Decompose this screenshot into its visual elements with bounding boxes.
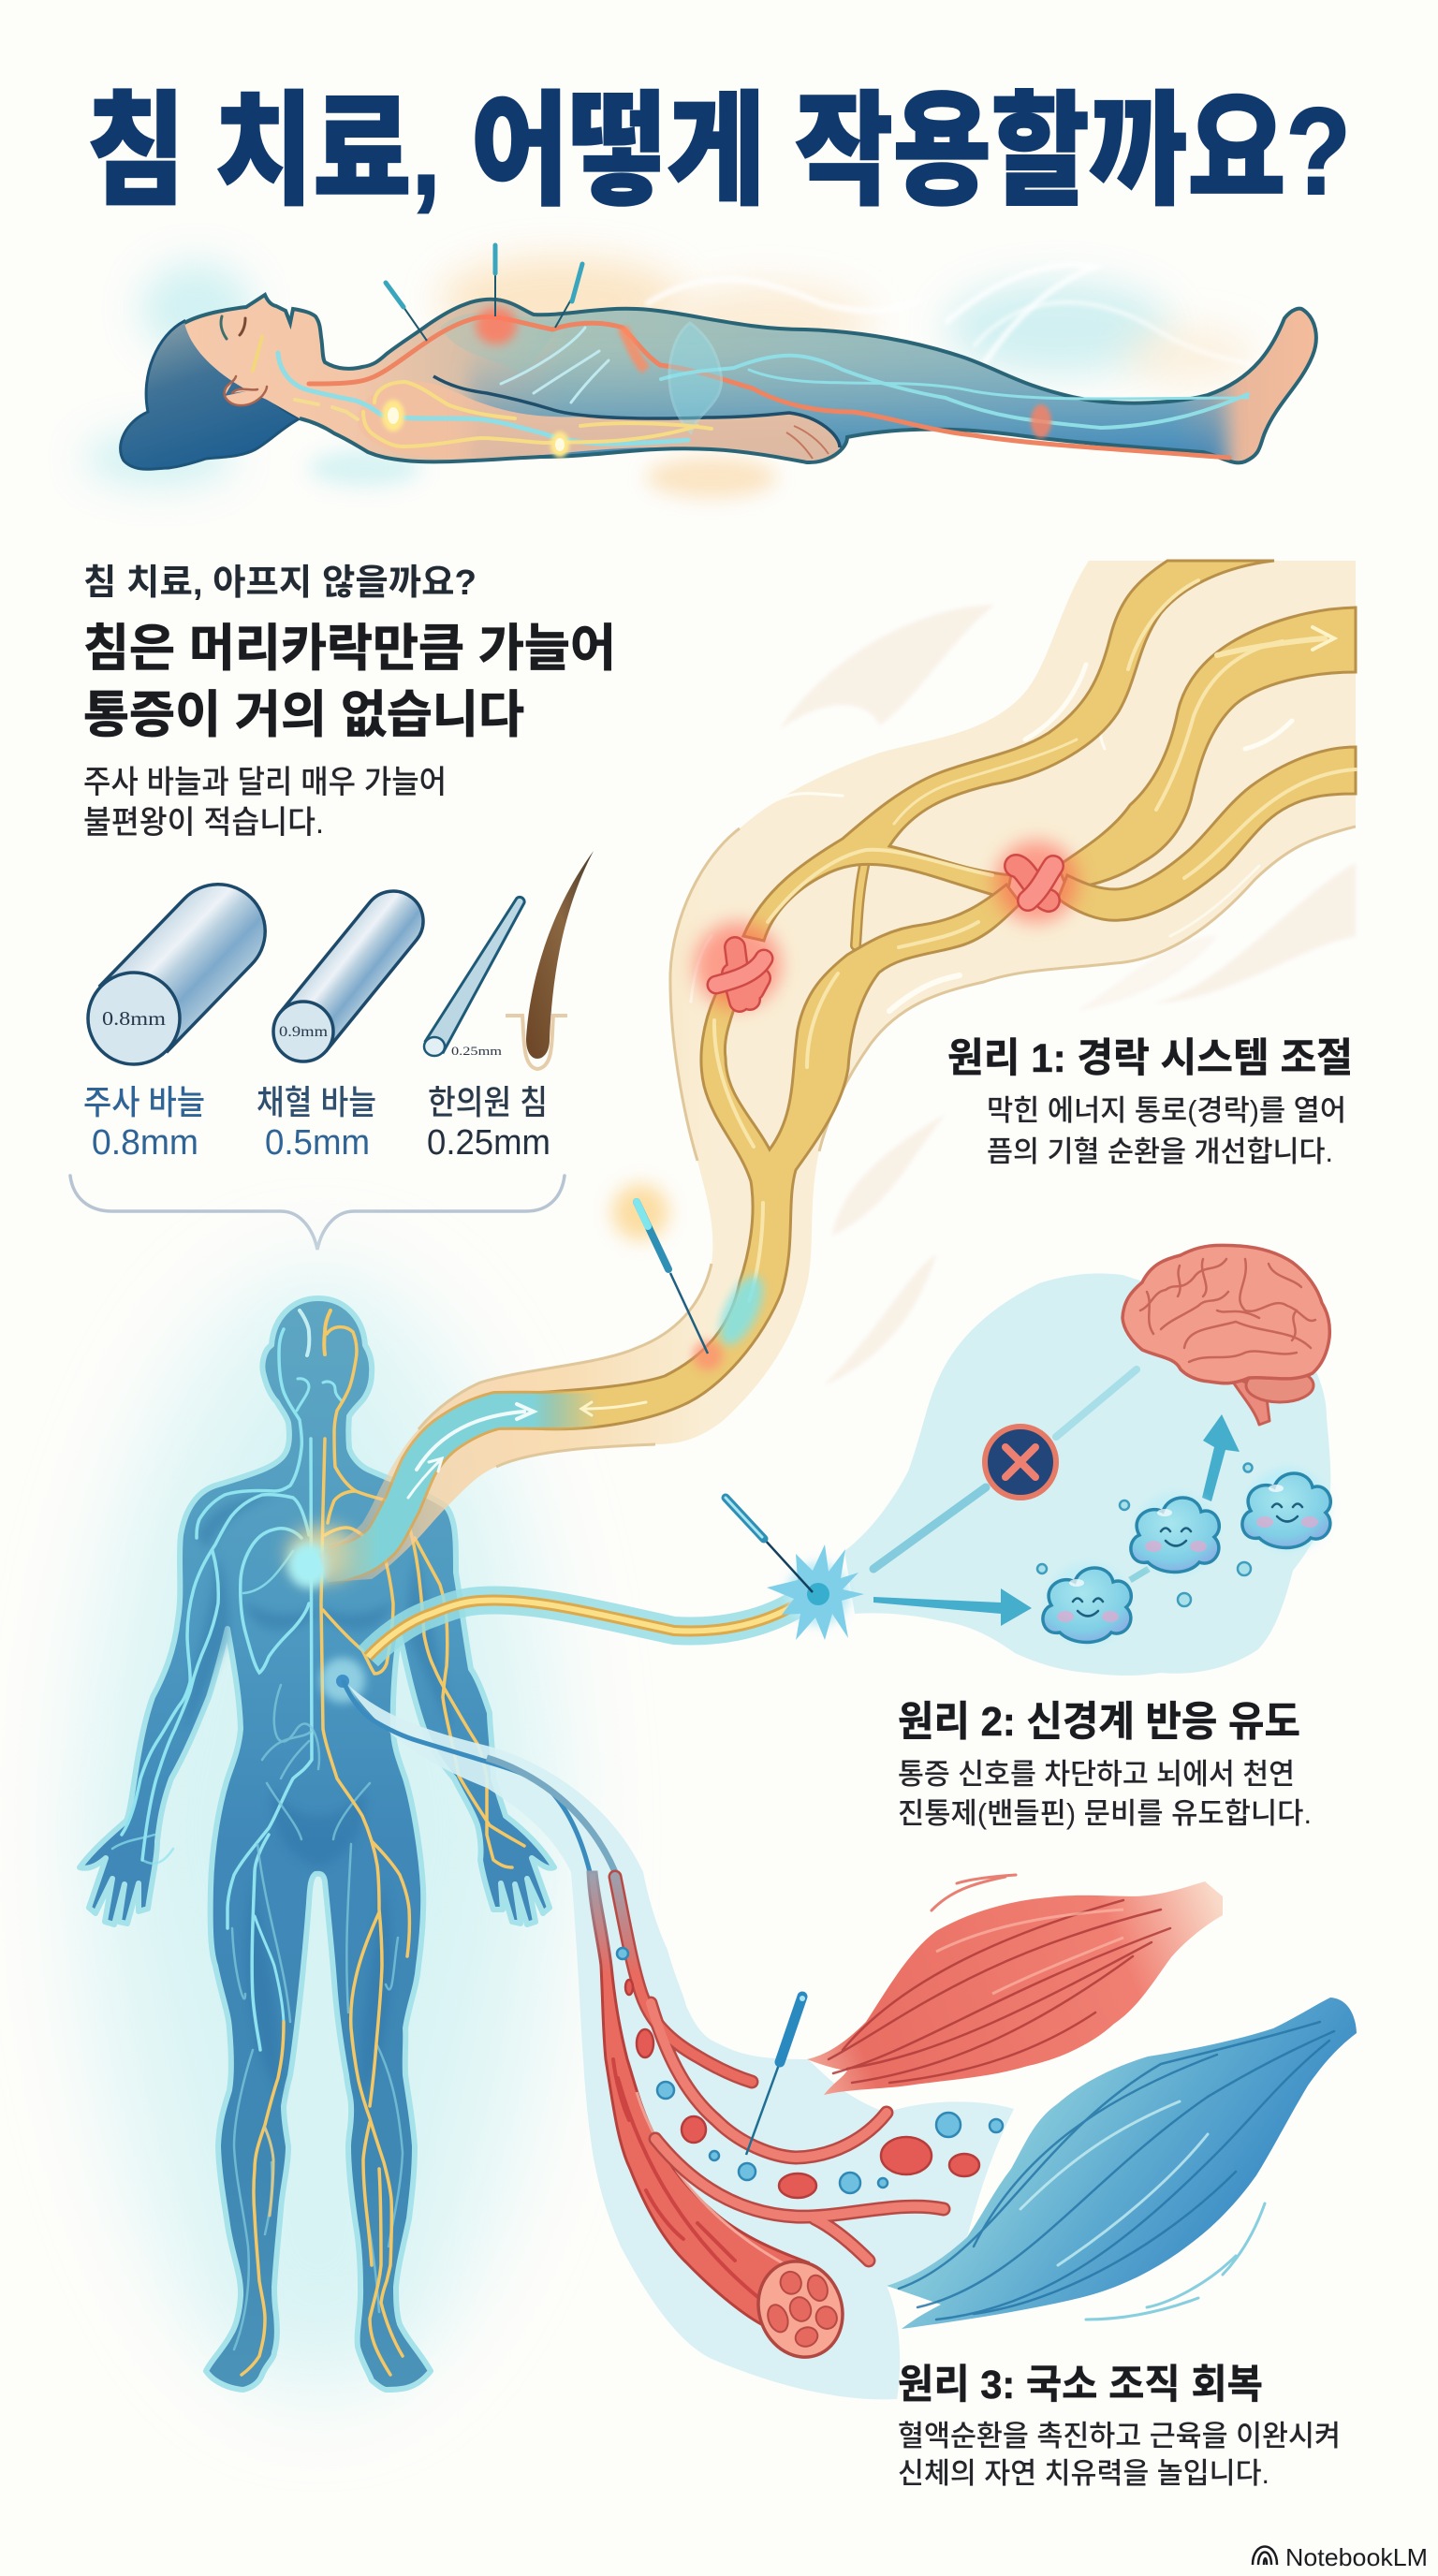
principle 1 text: 원리 1: 경락 시스템 조절 xyxy=(947,1036,1353,1081)
question heading: 침 치료, 아프지 않을까요? xyxy=(83,564,477,603)
second vessel line xyxy=(487,1758,615,1872)
meridian: yellow lines xyxy=(363,382,712,446)
lower trunk turning cyan xyxy=(325,1410,599,1566)
vessel end xyxy=(745,2249,856,2369)
brace xyxy=(70,1176,565,1250)
acupuncture needle xyxy=(424,897,524,1058)
principle 3 text: 혈액순환을 촉진하고 근육을 이완시켜 xyxy=(898,2420,1341,2452)
blue cells xyxy=(617,1948,1003,2193)
icon: brain xyxy=(1123,1245,1329,1425)
main message xyxy=(83,621,616,743)
muscle shading xyxy=(183,1493,454,2097)
label: lancet: 0.5mm xyxy=(265,1123,370,1163)
heart glow xyxy=(287,1526,359,1588)
injection needle cylinder xyxy=(88,885,265,1064)
abdomen point xyxy=(320,1658,365,1703)
gold channel A xyxy=(743,561,1274,941)
blocked signal line xyxy=(873,1369,1137,1569)
principle 2 text xyxy=(898,1699,1312,1830)
arm xyxy=(358,381,840,463)
label: acupuncture needle: 0.25mm xyxy=(427,1123,550,1163)
needle xyxy=(746,1996,805,2155)
body aura xyxy=(66,1264,572,2406)
principle 3 text: 신체의 자연 치유력을 놀입니다. xyxy=(898,2457,1269,2490)
injection needle cylinder: 0.8mm xyxy=(102,1007,166,1030)
label: injection needle: 0.8mm xyxy=(92,1123,198,1163)
highlights on ribbon xyxy=(691,665,1292,1011)
label: acupuncture needle xyxy=(427,1083,550,1163)
icon: knot 1 xyxy=(716,947,764,1002)
principle 1 text xyxy=(947,1036,1353,1168)
blood lancet cylinder: 0.9mm xyxy=(279,1024,329,1040)
hair xyxy=(121,321,300,469)
connector channel xyxy=(856,866,864,945)
panel: needle thickness explanation xyxy=(70,564,616,1250)
description xyxy=(83,765,447,841)
tense red muscle xyxy=(807,1875,1223,2095)
principle 2 text: 원리 2: 신경계 반응 유도 xyxy=(898,1699,1300,1745)
icon: hair follicle xyxy=(506,851,594,1069)
gold channels: shine xyxy=(714,580,1356,1301)
principle 1 text: 픔의 기혈 순환을 개선합니다. xyxy=(987,1135,1333,1168)
principle 3: local tissue recovery xyxy=(344,1682,1357,2490)
NotebookLM logo: NotebookLM xyxy=(1285,2543,1428,2571)
illustration: human body with meridians and nerves xyxy=(66,1264,572,2406)
description: 불편왕이 적습니다. xyxy=(83,805,324,841)
principle 3 text: 원리 3: 국소 조직 회복 xyxy=(898,2363,1263,2408)
knot glows xyxy=(695,841,1078,1008)
blue vessel line xyxy=(344,1682,590,1872)
icon: starburst xyxy=(767,1544,864,1640)
patient body xyxy=(184,295,1316,462)
cyan blob xyxy=(844,1274,1330,1676)
label: injection needle: 주사 바늘 xyxy=(83,1083,205,1121)
principle 2 text: 통증 신호를 차단하고 뇌에서 천연 xyxy=(898,1758,1295,1791)
description: 주사 바늘과 달리 매우 가늘어 xyxy=(83,765,447,800)
main message: 통증이 거의 없습니다 xyxy=(83,687,524,743)
gold channel C xyxy=(1058,747,1356,920)
illustration: reclining patient with acupuncture needles xyxy=(84,245,1316,498)
stomach organ xyxy=(669,323,722,432)
cyan meridians xyxy=(112,1310,342,2050)
ribbon edges xyxy=(418,827,1356,1467)
needle xyxy=(726,1498,813,1592)
body shading xyxy=(440,313,1226,477)
aura glow xyxy=(84,257,1292,498)
needles xyxy=(386,245,582,341)
arrow to endorphin xyxy=(873,1588,1032,1626)
principle 1 text: 막힌 에너지 통로(경락)를 열어 xyxy=(987,1094,1346,1127)
icon: endorphin 1 xyxy=(1043,1562,1131,1645)
face details xyxy=(221,316,267,405)
vessel shading xyxy=(613,2059,777,2312)
body silhouette xyxy=(80,1298,554,2390)
icon: blocked X xyxy=(985,1427,1056,1498)
beige ribbon xyxy=(318,561,1356,1582)
label: injection needle xyxy=(83,1083,205,1163)
branch vessels xyxy=(615,1877,944,2261)
faint deep vessels xyxy=(232,1685,403,2349)
spine xyxy=(295,400,358,419)
needle in meridian xyxy=(612,1184,771,1370)
yellow nerves xyxy=(242,1310,524,2375)
fingers xyxy=(786,426,829,459)
label: lancet xyxy=(257,1083,376,1163)
label: acupuncture needle: 한의원 침 xyxy=(428,1083,548,1121)
arrow up xyxy=(1202,1414,1240,1501)
icon: knot 2 xyxy=(1016,866,1053,900)
gold channel B xyxy=(1058,607,1356,889)
connector dash xyxy=(1130,1569,1149,1580)
meridian: cyan lines xyxy=(278,328,1248,444)
label: lancet: 채혈 바늘 xyxy=(257,1083,376,1121)
relaxed blue muscle xyxy=(887,1998,1357,2329)
meridian: red line xyxy=(309,317,1229,458)
main message: 침은 머리카락만큼 가늘어 xyxy=(83,621,616,677)
wisps xyxy=(780,605,1356,1385)
vessel highlight xyxy=(637,2092,786,2265)
principle 3 text xyxy=(898,2363,1341,2490)
flow arrows xyxy=(408,627,1334,1498)
big vessel xyxy=(588,1872,808,2324)
principle 1: meridian ribbon xyxy=(318,561,1356,1582)
blood lancet cylinder xyxy=(273,891,423,1061)
back contour line xyxy=(433,376,840,447)
red blood cells xyxy=(625,1980,979,2198)
icon: endorphin 2 xyxy=(1131,1492,1219,1574)
principle 2 text: 진통제(밴들핀) 문비를 유도합니다. xyxy=(898,1797,1312,1830)
nerve band from body xyxy=(368,1599,805,1657)
body outline xyxy=(184,295,1316,462)
cyan envelope xyxy=(348,1685,1014,2399)
icon: endorphin 3 xyxy=(1242,1468,1330,1550)
acupoint glows xyxy=(382,307,1051,458)
principle 2: nervous system response xyxy=(368,1245,1330,1830)
acupuncture needle: 0.25mm xyxy=(451,1044,502,1058)
bubbles xyxy=(1037,1464,1253,1606)
gold trunk xyxy=(534,885,1020,1429)
